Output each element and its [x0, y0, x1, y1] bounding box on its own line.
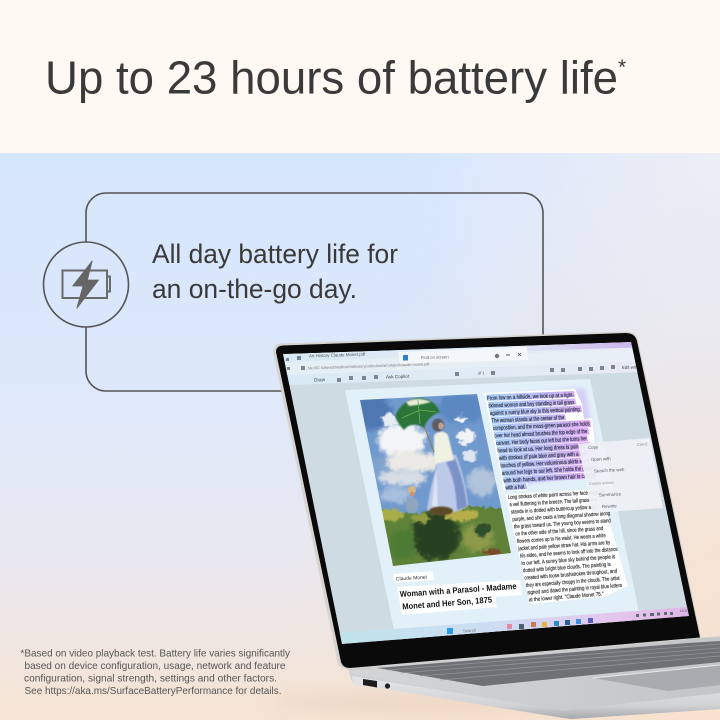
body paragraph: to our left. A sunny blue sky behind the people is — [521, 554, 616, 567]
highlighted paragraph: against a sunny blue sky in this vertical painting. — [490, 407, 581, 417]
body paragraph: dotted with bright blue clouds. The painting is — [523, 562, 611, 574]
browser chrome: of 1 — [478, 370, 485, 375]
context menu: Summarize — [599, 491, 622, 497]
body paragraph: stands in is dotted with buttercup yellow and — [511, 505, 596, 516]
body paragraph: jacket and pale yellow straw hat. His arms are by — [517, 540, 611, 552]
body paragraph: created with loose brushstrokes throughout, and — [524, 569, 617, 582]
highlighted paragraph: with strokes of pale blue and gray with a few — [498, 451, 588, 462]
caption: artist — [393, 571, 434, 583]
highlighted paragraph — [484, 388, 600, 492]
context menu — [578, 438, 663, 513]
highlighted paragraph: over her head almost brushes the top edge of the — [494, 429, 587, 439]
title: * — [618, 56, 626, 79]
highlighted paragraph: canvas. Her body faces our left but she turns her — [496, 436, 587, 447]
body paragraph: signed and dated the painting in royal blue letters — [527, 583, 623, 596]
laptop base — [348, 636, 720, 719]
laptop lid — [273, 332, 701, 669]
laptop screen — [283, 342, 690, 650]
highlighted paragraph: skinned woman and boy standing in tall grass — [488, 400, 575, 409]
grass — [382, 504, 511, 566]
browser chrome: Ask Copilot — [386, 374, 410, 379]
feature text: an on-the-go day. — [152, 274, 357, 304]
browser chrome: Art History Claude Monet.pdf — [309, 352, 366, 358]
laptop shadow — [270, 692, 610, 712]
feature text: All day battery life for — [152, 239, 398, 269]
highlighted paragraph: head to look at us. Her long dress is painted — [497, 444, 585, 454]
browser chrome: file:///C:/Users/Onedrive/Arthistory/collection/art-object/claude-monet.pdf — [308, 362, 430, 370]
browser chrome: Draw — [314, 377, 326, 383]
painting title — [397, 580, 522, 615]
context menu: Copilot actions — [589, 481, 614, 486]
footnote: based on device configuration, usage, network and feature — [24, 661, 286, 672]
feature outline panel — [86, 193, 543, 391]
highlighted paragraph: with both hands, and her brown hair is caught — [502, 473, 596, 485]
body paragraph: flowers comes up to his waist. He wears a white — [517, 533, 606, 545]
footnote — [20, 648, 291, 697]
body paragraph: at the lower right. "Claude Monet 75." — [529, 591, 604, 603]
context menu: Search the web — [594, 467, 625, 473]
feature text — [152, 239, 398, 304]
taskbar: Search — [463, 628, 477, 633]
audio jack — [385, 683, 390, 689]
find on screen popup — [398, 347, 528, 364]
context menu: Rewrite — [602, 503, 617, 509]
taskbar: 10:11 — [680, 608, 688, 613]
highlighted paragraph: composition, and the moss-green parasol she holds — [493, 421, 590, 432]
document page — [345, 379, 645, 650]
footnote: See https://aka.ms/SurfaceBatteryPerformance for details. — [24, 686, 282, 697]
body paragraph: the grass toward us. The young boy seems to stand — [514, 518, 611, 530]
woman — [424, 418, 468, 516]
background panel — [0, 153, 720, 720]
highlighted paragraph: around her legs to our left. She holds the parasol — [502, 466, 597, 477]
painting title: Woman with a Parasol - Madame — [399, 581, 517, 599]
painting: woman with a parasol — [360, 394, 511, 566]
footnote: configuration, signal strength, settings and other factors. — [24, 674, 277, 684]
find on screen popup: Find on screen — [421, 354, 449, 360]
body paragraph: his sides, and he seems to look off into the distance — [520, 547, 618, 560]
trackpad — [593, 665, 720, 691]
body paragraph: a veil fluttering in the breeze. The tall grass she — [509, 497, 597, 508]
child — [406, 486, 418, 513]
highlighted paragraph: with a hat. — [504, 484, 526, 492]
highlighted paragraph: From low on a hillside, we look up at a light- — [487, 393, 574, 402]
caption: artist: Claude Monet — [396, 575, 428, 582]
highlighted paragraph: touches of yellow. Her voluminous skirts swirl — [500, 459, 588, 469]
usb port — [363, 679, 377, 688]
context menu: Ctrl+C — [637, 442, 648, 447]
laptop — [270, 332, 720, 719]
context menu: Open with — [591, 456, 611, 462]
browser chrome — [283, 342, 642, 385]
parasol — [395, 398, 440, 430]
browser chrome: Edit with — [622, 364, 639, 370]
painting title: Monet and Her Son, 1875 — [402, 594, 493, 611]
body paragraph: on the other side of the hill, since the grass and — [515, 526, 603, 538]
context menu: Copy — [588, 444, 599, 450]
keyboard — [377, 641, 720, 686]
title: Up to 23 hours of battery life — [45, 52, 618, 104]
body paragraph — [505, 489, 628, 604]
taskbar — [339, 607, 690, 645]
body paragraph: they are especially choppy in the clouds. The artist — [526, 576, 620, 589]
header band — [0, 0, 720, 153]
footnote: *Based on video playback test. Battery life varies significantly — [20, 648, 291, 660]
body paragraph: purple, and she casts a long diagonal shadow along — [512, 511, 610, 523]
icon: battery with lightning bolt — [44, 242, 128, 327]
body paragraph: Long strokes of white paint across her face suggest — [508, 490, 604, 501]
highlighted paragraph: The woman stands at the center of the — [491, 415, 565, 424]
